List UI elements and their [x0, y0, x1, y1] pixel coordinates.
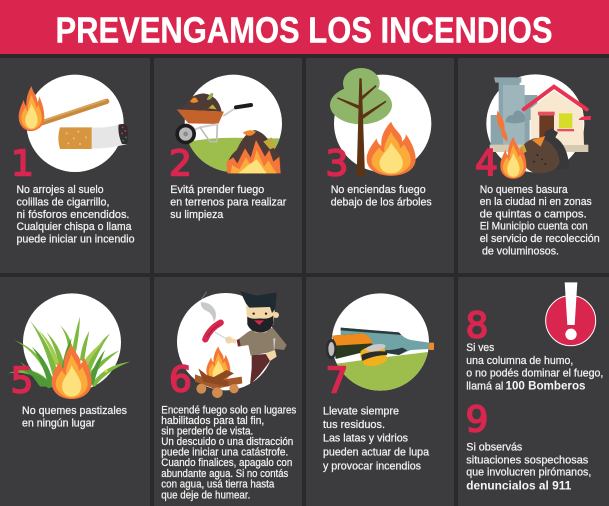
text block 4: No quemes basura	[480, 184, 569, 196]
text block 8: Si ves	[466, 342, 495, 354]
text block 6	[161, 404, 297, 501]
text block 8	[466, 342, 603, 392]
text block 7	[323, 405, 430, 472]
text block 5: No quemes pastizales	[22, 405, 127, 417]
icon: city, house and garbage fire	[486, 74, 591, 179]
text block 9	[466, 442, 591, 492]
number 5: 5	[10, 360, 33, 402]
text block 8: llamá al	[466, 380, 503, 392]
text block 7: pueden actuar de lupa	[323, 446, 430, 458]
icon: wheelbarrow and burning pile	[175, 75, 287, 177]
text block 1: ni fósforos encendidos.	[16, 209, 130, 221]
icon: match and cigarette	[19, 75, 128, 172]
text block 3	[331, 184, 432, 208]
text block 4	[480, 184, 600, 257]
text block 6: Un descuido o una distracción	[161, 436, 293, 448]
text block 9: Si observás	[466, 442, 523, 454]
text block 5	[22, 405, 127, 430]
text block 4: El Municipio cuenta con	[480, 220, 588, 232]
number 1: 1	[11, 144, 34, 184]
text block 9: denuncialos al 911	[466, 480, 572, 492]
icon: tree and flame	[330, 68, 431, 176]
text block 4: de voluminosos.	[482, 245, 559, 257]
panel 6: campfire	[154, 277, 302, 506]
number 2: 2	[169, 144, 192, 184]
icon: man grilling at campfire	[177, 291, 287, 398]
panel 8 and 9: emergency numbers	[458, 277, 609, 506]
text block 8: o no podés dominar el fuego,	[466, 368, 603, 380]
panel 7: cans and glass	[306, 277, 454, 506]
text block 1: colillas de cigarrillo,	[16, 196, 110, 208]
text block 6: Encendé fuego solo en lugares	[161, 404, 297, 416]
text block 9: situaciones sospechosas	[466, 454, 589, 466]
icon: exclamation alert	[546, 282, 596, 346]
text block 1: Cualquier chispa o llama	[16, 221, 132, 233]
text block 1: No arrojes al suelo	[16, 184, 104, 196]
text block 2	[170, 184, 287, 221]
text block 9: que involucren pirómanos,	[466, 466, 591, 478]
number 3: 3	[326, 144, 348, 184]
text block 8: una columna de humo,	[466, 355, 573, 367]
text block 6: con agua, usá tierra hasta	[161, 478, 275, 490]
title banner	[0, 0, 609, 54]
text block 2: en terrenos para realizar	[170, 196, 287, 208]
text block 6: sin perderlo de vista.	[161, 425, 253, 437]
panel 3: fire under trees	[306, 58, 454, 273]
text block 6: que deje de humear.	[161, 489, 250, 501]
text block 3: debajo de los árboles	[331, 196, 432, 208]
number 9: 9	[466, 400, 488, 440]
text block 4: de quintas o campos.	[480, 208, 587, 220]
text block 8: 100 Bomberos	[506, 380, 586, 392]
text block 7: y provocar incendios	[323, 460, 421, 472]
text block 2: su limpieza	[170, 209, 224, 221]
text block 4: el servicio de recolección	[480, 233, 600, 245]
text block 6: habilitados para tal fin,	[161, 415, 264, 427]
text block 7: Las latas y vidrios	[323, 433, 408, 445]
text block 7: tus residuos.	[323, 419, 385, 431]
panel 2: land clearing	[154, 58, 302, 273]
text block 3: No enciendas fuego	[331, 184, 426, 196]
text block 7: Llevate siempre	[323, 405, 399, 417]
number 7: 7	[326, 360, 348, 402]
text block 5: en ningún lugar	[22, 418, 95, 430]
icon: grass and flame	[8, 293, 131, 399]
text block 1	[16, 184, 134, 246]
number 4: 4	[475, 143, 498, 184]
text block 6: puede iniciar una catástrofe.	[161, 447, 288, 459]
number 6: 6	[169, 360, 192, 400]
panel 4: burning garbage	[458, 58, 609, 273]
text block 6: Cuando finalices, apagalo con	[161, 457, 292, 469]
text block 6: abundante agua. Si no contás	[161, 468, 289, 480]
text block 4: en la ciudad ni en zonas	[480, 196, 592, 208]
panel 1: cigarettes and matches	[0, 58, 150, 273]
icon: bottle and cans	[326, 293, 434, 395]
number 8: 8	[466, 306, 488, 346]
text block 1: puede iniciar un incendio	[16, 234, 134, 246]
text block 2: Evitá prender fuego	[170, 184, 264, 196]
panel 5: grasslands	[0, 277, 150, 506]
